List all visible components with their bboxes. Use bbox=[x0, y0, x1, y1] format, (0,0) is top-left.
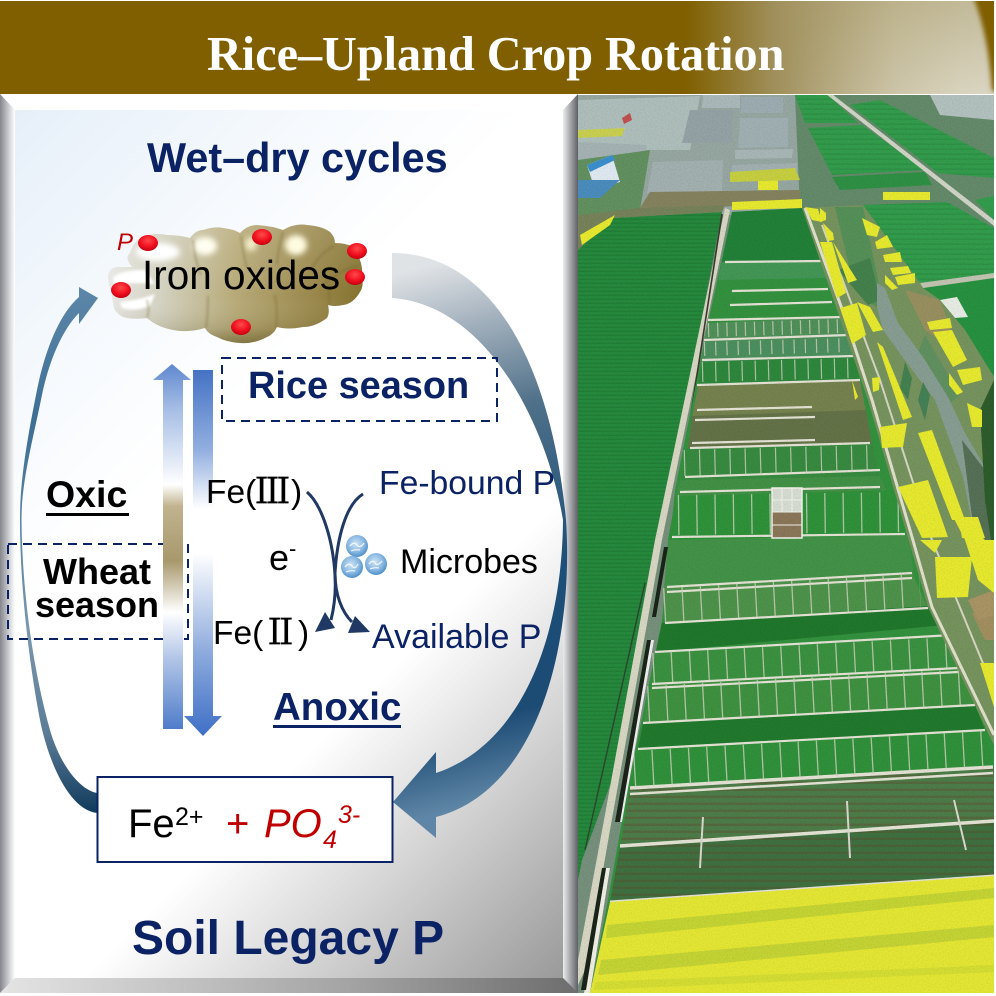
panel: bevelled mechanism card bbox=[0, 94, 578, 993]
heading: wet–dry cycles: Wet–dry cycles bbox=[147, 135, 448, 181]
highlights bbox=[136, 235, 307, 261]
label: Fe(II): Ⅱ bbox=[263, 605, 298, 655]
label: oxic: Oxic bbox=[46, 473, 127, 515]
box: Fe2+ + PO4 3-: 3- bbox=[338, 801, 360, 829]
arrow: iron oxides to Fe2+ bbox=[392, 253, 567, 838]
greenhouse bbox=[772, 488, 802, 538]
label: Fe(II): Fe( bbox=[213, 615, 263, 652]
label: electron: - bbox=[289, 536, 296, 561]
plot-side paths bbox=[805, 208, 994, 735]
canal bbox=[877, 283, 994, 560]
box: Fe2+ + PO4 3-: + bbox=[226, 802, 249, 846]
label: Fe(III): Fe( bbox=[206, 474, 256, 511]
instrument posts bbox=[700, 800, 966, 868]
label: microbes: Microbes bbox=[400, 543, 538, 581]
label: P: P bbox=[117, 229, 133, 256]
label: available P: Available P bbox=[372, 618, 542, 656]
photo grain bbox=[578, 95, 994, 993]
label: Fe(III): Ⅲ bbox=[255, 464, 290, 514]
box: Fe2+ + PO4 3-: PO bbox=[264, 802, 322, 846]
label: anoxic: Anoxic bbox=[273, 686, 401, 729]
plot dividers bbox=[610, 261, 994, 902]
arrow: Fe(III) to Fe(II) bbox=[307, 492, 335, 632]
phosphate dots bbox=[111, 229, 367, 335]
title: Rice–Upland Crop Rotation bbox=[207, 28, 785, 81]
box: Fe2+ + PO4 3- bbox=[98, 777, 392, 862]
central experimental plots bbox=[590, 208, 994, 992]
box: Fe2+ + PO4 3-: Fe bbox=[128, 802, 175, 846]
arrow: Fe-bound P to available P bbox=[335, 494, 370, 633]
strip between plots, canal and far bank bbox=[802, 205, 994, 745]
arrow: Fe2+ back to iron oxides bbox=[20, 287, 98, 813]
callout: wheat season: season bbox=[35, 584, 159, 625]
rapeseed field foreground bbox=[590, 876, 994, 993]
callout: rice season bbox=[222, 358, 497, 421]
ponds and buildings at far end bbox=[578, 95, 994, 230]
yellow rapeseed hedges bbox=[580, 168, 994, 707]
callout: wheat season: Wheat bbox=[43, 551, 151, 592]
label: Fe-bound P: Fe-bound P bbox=[379, 464, 555, 502]
icon: microbes bbox=[341, 535, 387, 578]
callout: rice season: Rice season bbox=[248, 365, 469, 407]
label: Fe(II): ) bbox=[298, 615, 309, 652]
left wheat field bbox=[578, 212, 722, 880]
photo: aerial view of rice–upland field plots bbox=[578, 94, 994, 993]
arrow: reduction downward bbox=[184, 370, 222, 736]
heading: soil legacy P: Soil Legacy P bbox=[132, 912, 444, 965]
lower left road and ditch bbox=[581, 547, 668, 993]
box: Fe2+ + PO4 3-: 2+ bbox=[175, 803, 204, 831]
label: iron oxides: Iron oxides bbox=[142, 252, 340, 298]
callout: wheat season bbox=[8, 544, 188, 639]
title banner bbox=[0, 0, 996, 96]
label: Fe(III): ) bbox=[291, 474, 302, 511]
creases bbox=[147, 232, 358, 328]
arrow: oxidation upward bbox=[153, 364, 191, 729]
box: Fe2+ + PO4 3-: 4 bbox=[323, 826, 337, 854]
iron oxide cloud bbox=[108, 225, 363, 343]
farm road bbox=[578, 208, 730, 985]
upper right fields bbox=[795, 94, 994, 377]
label: electron: e bbox=[269, 537, 289, 578]
